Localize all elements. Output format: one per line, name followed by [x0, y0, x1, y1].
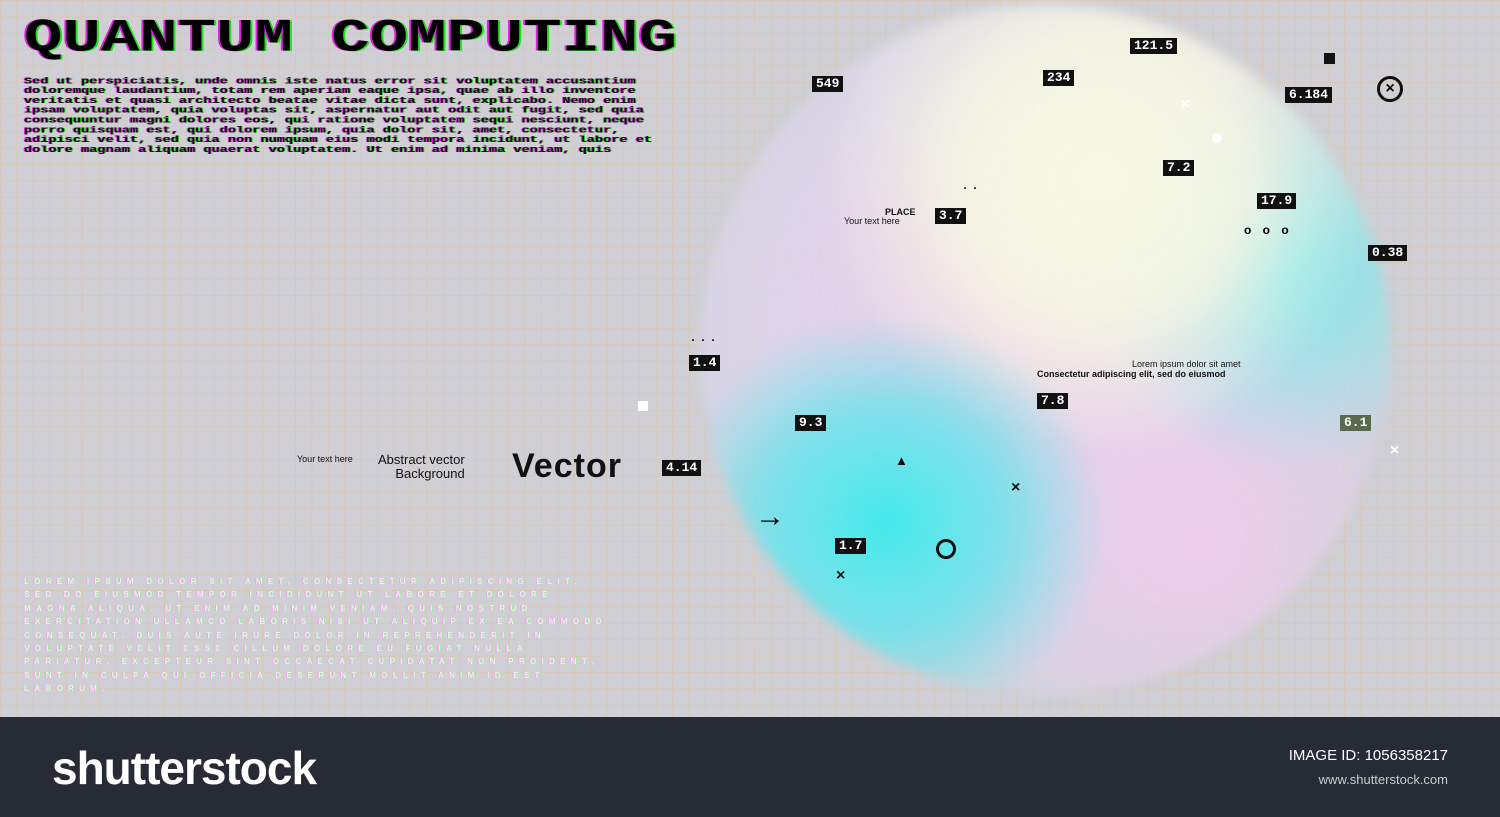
text: 17.9 — [1261, 193, 1292, 208]
text: 6.1 — [1344, 415, 1367, 430]
text: o o o — [1244, 223, 1293, 237]
text: Your text here — [844, 216, 900, 226]
text: ... — [690, 333, 720, 344]
holographic blob — [700, 5, 1390, 695]
text: 1.7 — [839, 538, 862, 553]
footer bar — [0, 717, 1500, 817]
text: × — [836, 567, 845, 584]
text: Your text here — [297, 454, 353, 464]
text: × — [1180, 96, 1189, 113]
number labels — [662, 38, 1407, 559]
text: Consectetur adipiscing elit, sed do eiusmod — [1037, 369, 1226, 379]
text: .. — [962, 181, 982, 192]
text: ▲ — [895, 453, 908, 468]
text: 7.8 — [1041, 393, 1064, 408]
footer bar: IMAGE ID: 1056358217 — [1289, 747, 1448, 764]
text: Lorem ipsum dolor sit amet — [1132, 359, 1241, 369]
icons — [638, 53, 1403, 584]
text: Vector — [512, 447, 622, 485]
faded paragraph: LOREM IPSUM DOLOR SIT AMET, CONSECTETUR ADIPISCING ELIT, SED DO EIUSMOD TEMPOR INCIDIDUNT UT LABORE ET DOLORE MAGNA ALIQUA. UT ENIM AD MINIM VENIAM, QUIS NOSTRUD EXERCITATION ULLAMCO LABORIS NISI UT ALIQUIP EX EA COMMODO CONSEQUAT. DUIS AUTE IRURE DOLOR IN REPREHENDERIT IN VOLUPTATE VELIT ESSE CILLUM DOLORE EU FUGIAT NULLA PARIATUR. EXCEPTEUR SINT OCCAECAT CUPIDATAT NON PROIDENT, SUNT IN CULPA QUI OFFICIA DESERUNT MOLLIT ANIM ID EST LABORUM. — [24, 577, 607, 693]
text: 4.14 — [666, 460, 697, 475]
footer bar: www.shutterstock.com — [1319, 772, 1448, 787]
text: × — [1011, 479, 1020, 496]
footer bar: shutterstock — [52, 742, 316, 794]
text: 9.3 — [799, 415, 822, 430]
text: 6.184 — [1289, 87, 1328, 102]
title: QUANTUM COMPUTING — [24, 13, 677, 65]
text: 7.2 — [1167, 160, 1190, 175]
text: 234 — [1047, 70, 1070, 85]
text: → — [755, 500, 785, 533]
small captions — [297, 207, 1241, 485]
text: 549 — [816, 76, 839, 91]
text: 0.38 — [1372, 245, 1403, 260]
text: 1.4 — [693, 355, 716, 370]
text: Abstract vector — [378, 452, 465, 467]
paragraph text: Sed ut perspiciatis, unde omnis iste natus error sit voluptatem accusantium doloremque laudantium, totam rem aperiam eaque ipsa, quae ab illo inventore veritatis et quasi architecto beatae vitae dicta sunt, explicabo. Nemo enim ipsam voluptatem, quia voluptas sit, aspernatur aut odit aut fugit, sed quia consequuntur magni dolores eos, qui ratione voluptatem sequi nesciunt, neque porro quisquam est, qui dolorem ipsum, quia dolor sit, amet, consectetur, adipisci velit, sed quia non numquam eius modi tempora incidunt, ut labore et dolore magnam aliquam quaerat voluptatem. Ut enim ad minima veniam, quis — [24, 76, 652, 155]
text: × — [1390, 442, 1399, 459]
text: Background — [395, 466, 465, 481]
text: × — [1385, 80, 1395, 97]
text: 121.5 — [1134, 38, 1173, 53]
text: PLACE — [885, 207, 916, 217]
text: 3.7 — [939, 208, 962, 223]
